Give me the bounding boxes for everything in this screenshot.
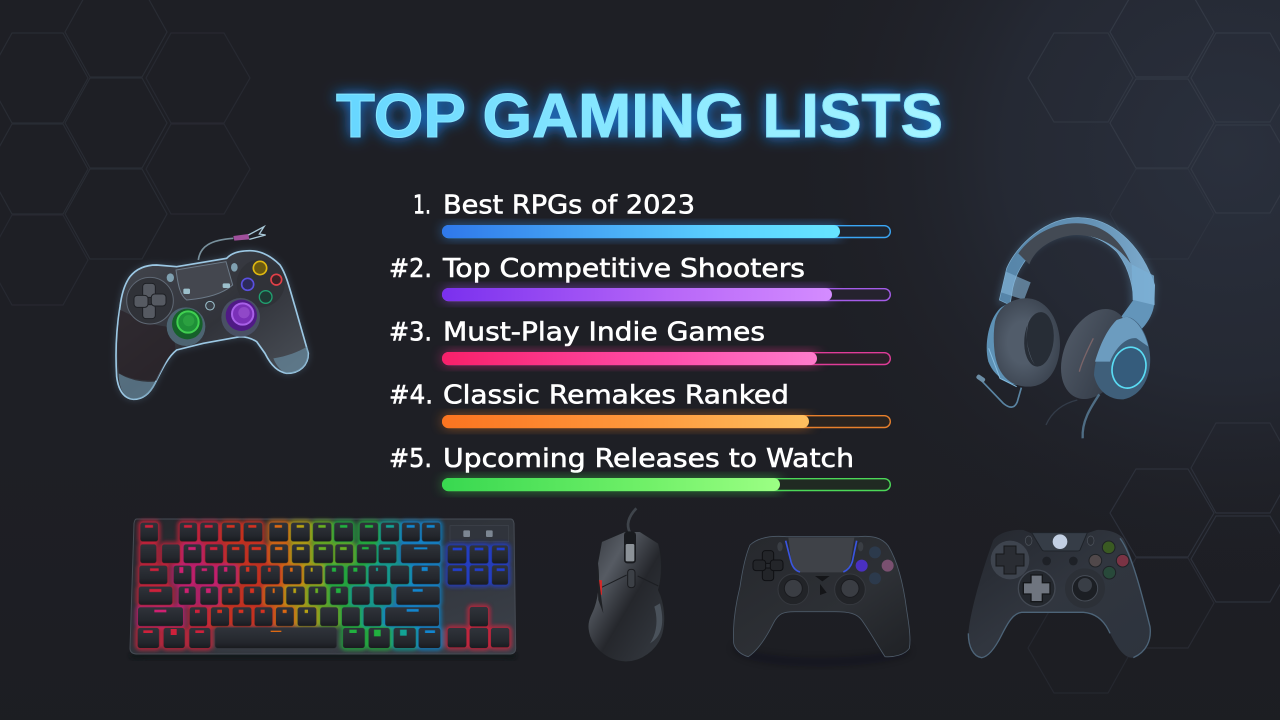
icon: Xbox-style controller xyxy=(968,530,1150,658)
icon: RGB mechanical keyboard xyxy=(130,519,517,660)
touchpad xyxy=(176,262,233,300)
side button xyxy=(598,580,602,595)
rank 4: #4. xyxy=(389,380,433,410)
face button plate xyxy=(237,259,285,307)
key caps xyxy=(137,522,510,648)
purple stick xyxy=(221,298,260,337)
progress bar 3 xyxy=(442,352,890,365)
key glow layer xyxy=(137,522,510,648)
cable xyxy=(1083,394,1099,438)
guide panel xyxy=(1032,533,1087,551)
label 5: Upcoming Releases to Watch xyxy=(443,444,854,474)
list item 4 xyxy=(389,380,890,428)
hexagon pattern: right bottom xyxy=(1028,423,1280,693)
icon: translucent glowing gamepad xyxy=(116,227,308,399)
icon: mouse xyxy=(588,508,665,662)
grip tips xyxy=(119,347,308,399)
centre logo xyxy=(815,576,830,581)
cable xyxy=(198,238,233,260)
icon: headset xyxy=(976,218,1155,438)
label 3: Must-Play Indie Games xyxy=(443,318,765,348)
list item 2 xyxy=(389,254,890,301)
lower d-pad stick xyxy=(1018,570,1055,607)
list item 5 xyxy=(389,444,890,491)
right earcup xyxy=(1048,298,1150,410)
headband xyxy=(999,218,1155,312)
hexagon pattern: right top xyxy=(1028,0,1280,259)
rank 1: 1. xyxy=(413,190,431,220)
scroll wheel xyxy=(624,532,636,588)
list item 3 xyxy=(389,318,890,365)
d-pad plate xyxy=(127,277,173,324)
hexagon pattern: left xyxy=(0,0,250,305)
title: TOP GAMING LISTS xyxy=(336,82,943,151)
label 4: Classic Remakes Ranked xyxy=(443,380,789,410)
media plate xyxy=(450,526,509,542)
rank 2: #2. xyxy=(389,254,432,284)
face buttons xyxy=(1102,541,1115,554)
mic boom xyxy=(979,378,1021,407)
progress bar 2 xyxy=(442,288,890,301)
list item 1 xyxy=(413,190,890,238)
progress bar 4 xyxy=(442,415,890,428)
rank 5: #5. xyxy=(389,444,432,474)
mouse cable xyxy=(628,508,636,533)
face buttons xyxy=(869,546,881,558)
label 2: Top Competitive Shooters xyxy=(442,254,805,284)
d-pad xyxy=(753,551,783,581)
progress bar 1 xyxy=(442,225,890,238)
left d-pad plate xyxy=(991,541,1029,579)
thumbsticks xyxy=(778,574,809,605)
icon: PS-style controller xyxy=(733,536,910,662)
label 1: Best RPGs of 2023 xyxy=(443,190,695,220)
touchpad xyxy=(788,538,854,572)
rank 3: #3. xyxy=(389,318,432,348)
green stick xyxy=(167,307,205,346)
left earcup xyxy=(987,298,1060,387)
right yoke xyxy=(1120,300,1154,338)
right thumbstick xyxy=(1065,568,1105,608)
progress bar 5 xyxy=(442,478,890,491)
